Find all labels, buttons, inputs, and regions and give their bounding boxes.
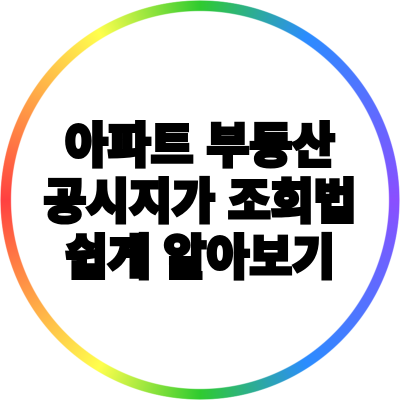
title: 쉽게 알아보기 [65, 232, 335, 285]
title: 공시지가 조회법 [44, 176, 356, 229]
title: 아파트 부동산 [65, 120, 335, 173]
